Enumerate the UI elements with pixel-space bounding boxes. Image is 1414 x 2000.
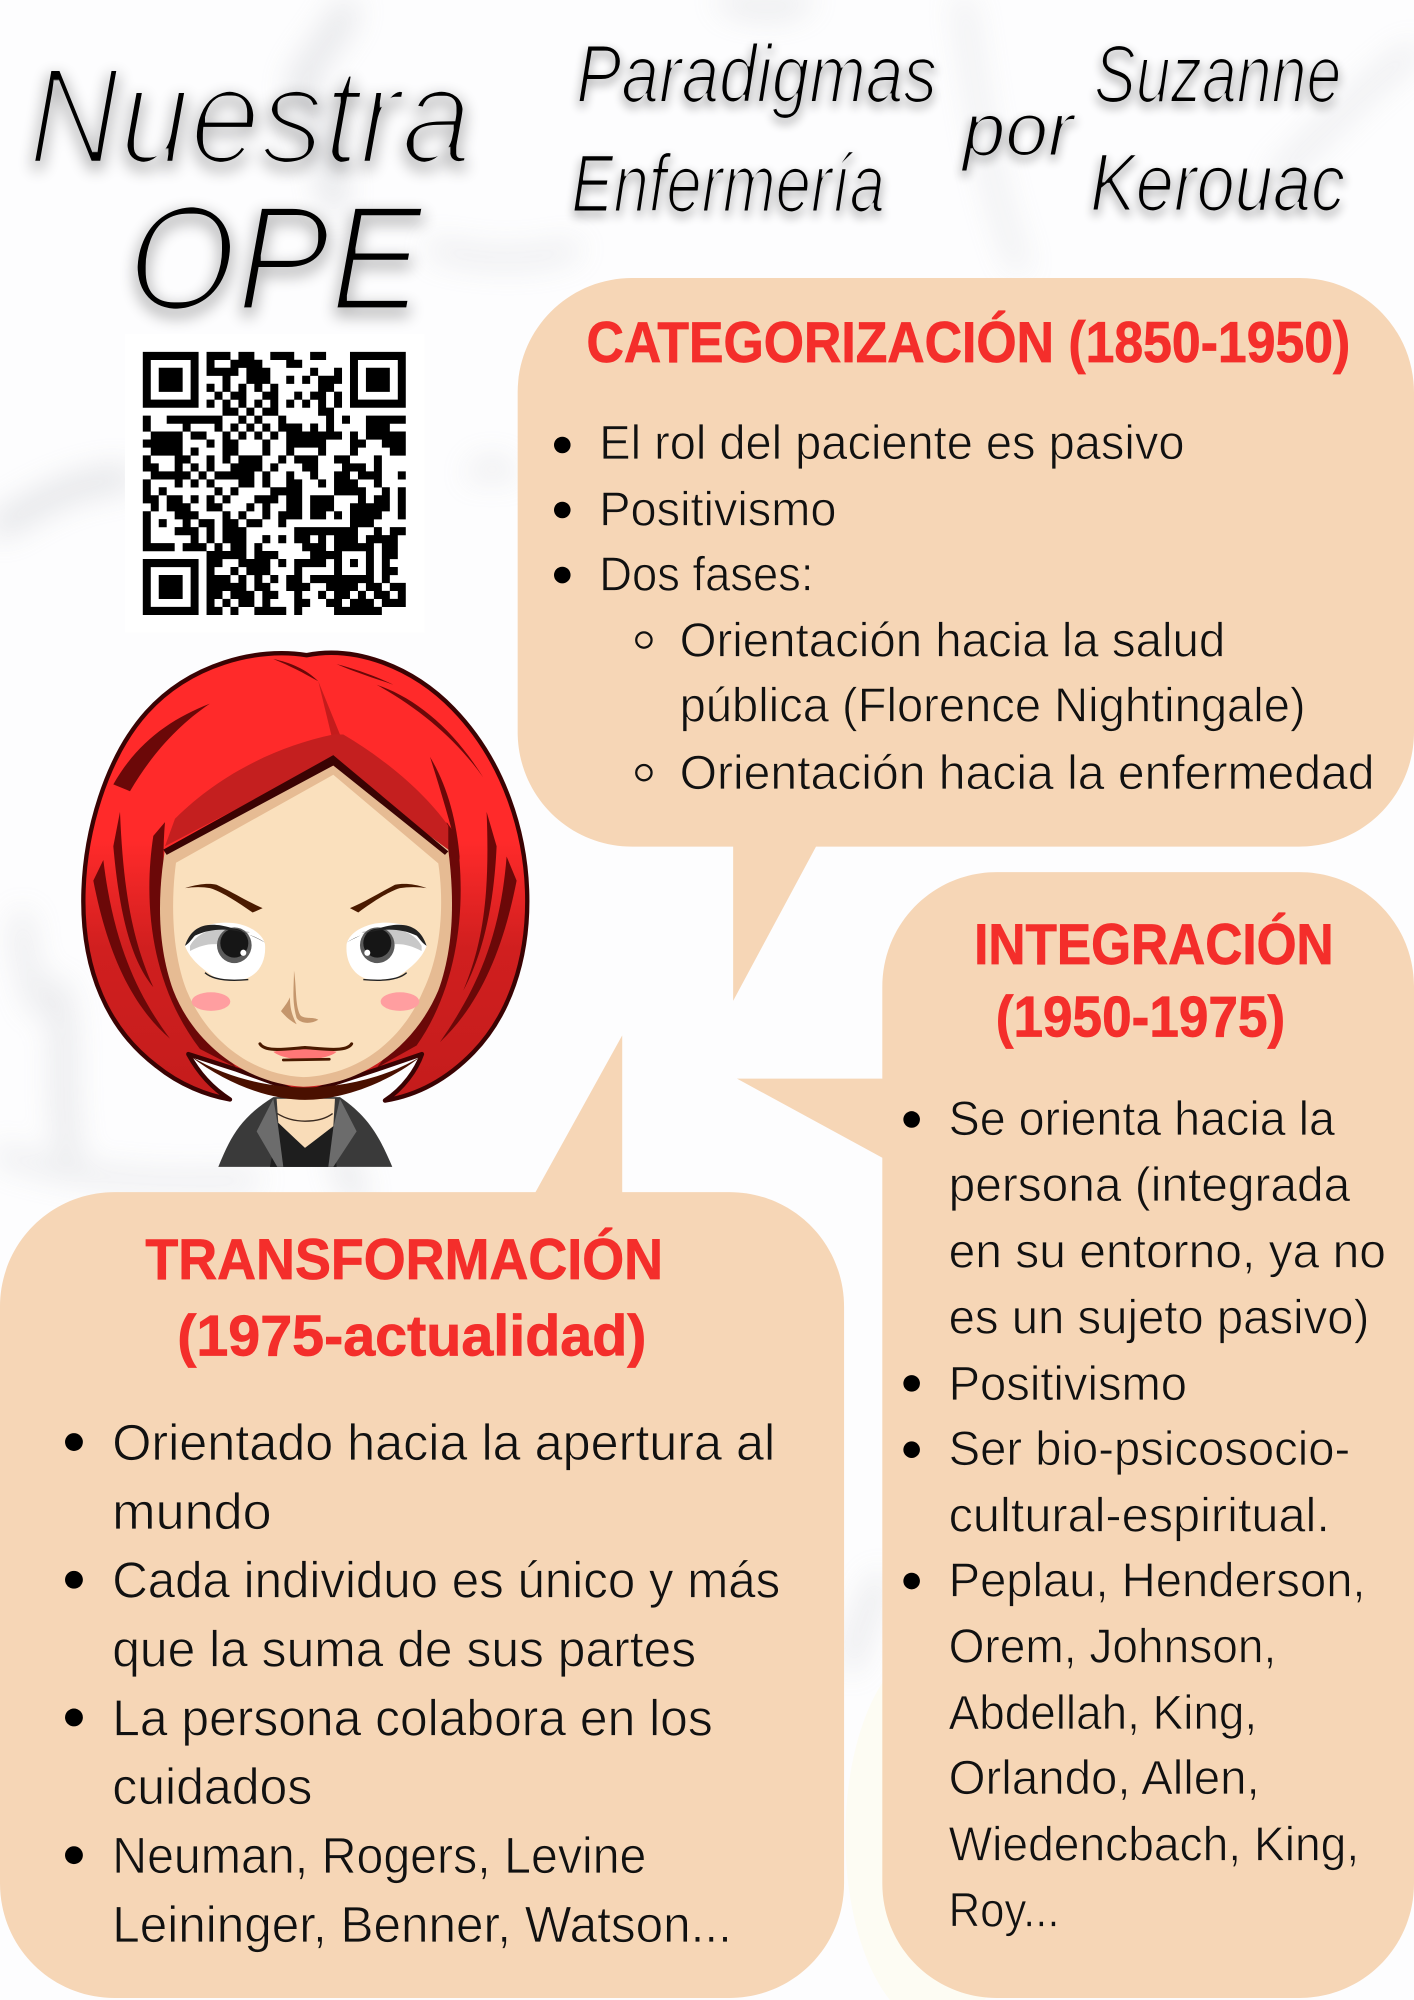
- bubble shape: [518, 278, 1414, 1001]
- jacket: [218, 1097, 392, 1167]
- hair: [83, 653, 527, 1101]
- hair fringe: [165, 735, 448, 853]
- heading: (1975-actualidad): [177, 1304, 646, 1368]
- subtitle: Paradigmas Enfermería por Suzanne Kerouac: Kerouac: [1090, 137, 1345, 228]
- list: Dos fases:: [599, 547, 813, 601]
- subtitle: Paradigmas Enfermería por Suzanne Kerouac: Enfermería: [571, 139, 885, 230]
- face: [160, 765, 452, 1087]
- list: pública (Florence Nightingale): [680, 679, 1306, 733]
- list: Abdellah, King,: [949, 1686, 1257, 1740]
- list: Orlando, Allen,: [949, 1751, 1260, 1805]
- panel: integración: [737, 872, 1414, 1998]
- subtitle: Paradigmas Enfermería por Suzanne Kerouac: Paradigmas: [576, 29, 937, 120]
- character: red-haired nurse: [83, 653, 527, 1167]
- list: Orientado hacia la apertura al: [112, 1414, 775, 1471]
- heading: (1950-1975): [996, 986, 1285, 1050]
- list: [903, 1092, 1386, 1938]
- mouth: [260, 1044, 352, 1060]
- QR code: [125, 334, 425, 632]
- title: Nuestra OPE: OPE: [128, 174, 425, 342]
- list: es un sujeto pasivo): [949, 1291, 1369, 1345]
- title: Nuestra OPE: [28, 39, 472, 342]
- fringe shadow line: [163, 755, 448, 855]
- nose: [281, 971, 318, 1024]
- list: Cada individuo es único y más: [112, 1552, 780, 1609]
- list: que la suma de sus partes: [112, 1620, 696, 1677]
- heading: CATEGORIZACIÓN (1850-1950): [587, 311, 1350, 375]
- cheeks: [192, 992, 419, 1011]
- panel: categorización: [518, 278, 1414, 1001]
- list: Roy...: [949, 1884, 1060, 1938]
- heading: [145, 1228, 663, 1368]
- list: La persona colabora en los: [112, 1689, 713, 1746]
- list: [65, 1414, 780, 1953]
- title: Nuestra OPE: Nuestra: [28, 39, 472, 193]
- list: Orientación hacia la salud: [680, 614, 1225, 668]
- list: El rol del paciente es pasivo: [599, 416, 1184, 470]
- list: Orientación hacia la enfermedad: [680, 746, 1374, 800]
- list: mundo: [112, 1483, 272, 1540]
- eyebrows: [185, 884, 427, 913]
- jaw shadow: [190, 1056, 422, 1100]
- list: cultural-espiritual.: [949, 1488, 1330, 1542]
- heading: [974, 913, 1334, 1050]
- bubble shape: [0, 1035, 844, 1998]
- heading: INTEGRACIÓN: [974, 913, 1334, 977]
- list: persona (integrada: [949, 1158, 1350, 1212]
- subtitle: Paradigmas Enfermería por Suzanne Kerouac: [571, 29, 1345, 230]
- eyes: [185, 923, 427, 980]
- list: Orem, Johnson,: [949, 1620, 1276, 1674]
- list: [554, 416, 1374, 800]
- list: Leininger, Benner, Watson...: [112, 1896, 732, 1953]
- list: en su entorno, ya no: [949, 1224, 1386, 1278]
- heading: TRANSFORMACIÓN: [145, 1228, 663, 1292]
- hair strands: [93, 659, 517, 1068]
- list: Peplau, Henderson,: [949, 1553, 1366, 1607]
- list: Wiedencbach, King,: [949, 1817, 1359, 1871]
- list: Positivismo: [949, 1357, 1187, 1411]
- subtitle: Paradigmas Enfermería por Suzanne Kerouac: Suzanne: [1094, 29, 1341, 120]
- list: Ser bio-psicosocio-: [949, 1422, 1350, 1476]
- bubble shape: [737, 872, 1414, 1998]
- list: Positivismo: [599, 482, 836, 536]
- subtitle: Paradigmas Enfermería por Suzanne Kerouac: por: [961, 88, 1077, 173]
- panel: transformación: [0, 1035, 844, 1998]
- list: cuidados: [112, 1758, 312, 1815]
- list: Se orienta hacia la: [949, 1092, 1335, 1146]
- list: Neuman, Rogers, Levine: [112, 1827, 646, 1884]
